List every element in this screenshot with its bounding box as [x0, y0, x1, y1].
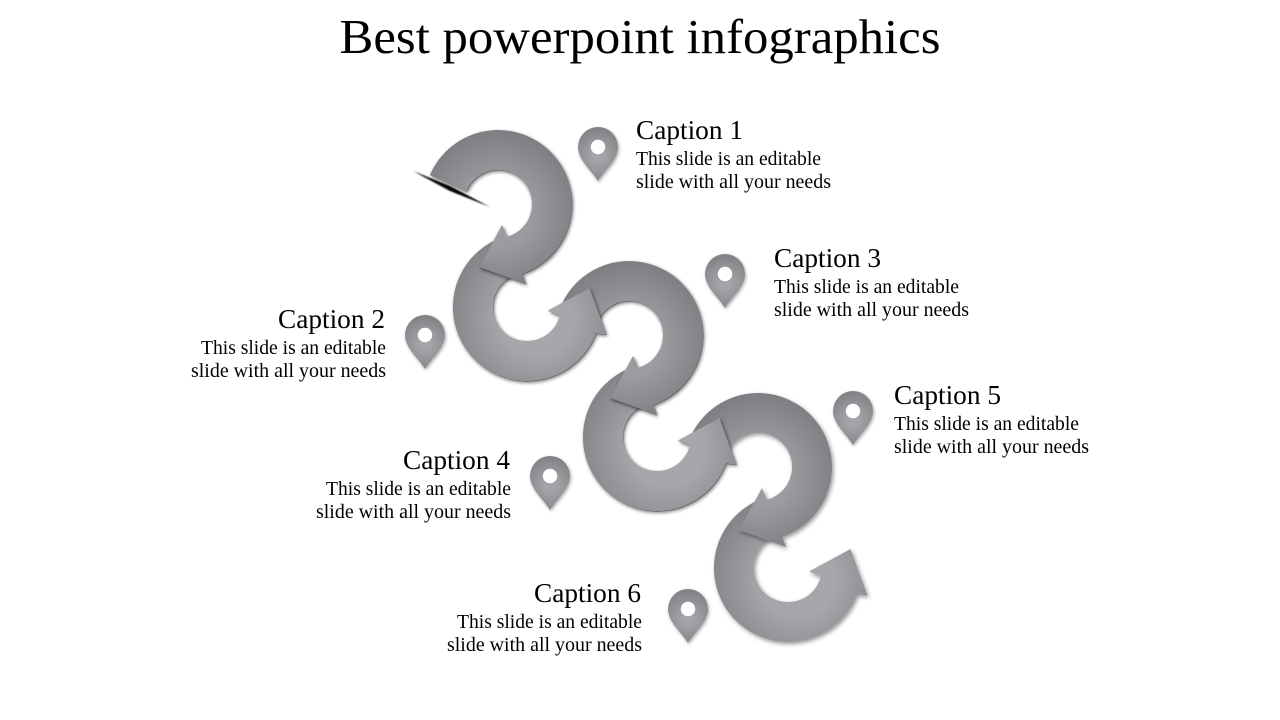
- pin 4: [530, 456, 570, 510]
- caption block 3: slide with all your needs: [774, 300, 969, 321]
- pin 6: [668, 589, 708, 643]
- caption block 6: This slide is an editable: [457, 612, 642, 633]
- arrow 6: [714, 498, 868, 642]
- caption block 1: This slide is an editable: [636, 149, 821, 170]
- caption block 2: [191, 304, 386, 382]
- caption block 1: slide with all your needs: [636, 172, 831, 193]
- arrow chain: [413, 130, 868, 642]
- caption block 4: Caption 4: [403, 445, 511, 475]
- caption block 1: [636, 115, 831, 193]
- arrow 4: [583, 367, 736, 511]
- caption block 2: Caption 2: [278, 304, 385, 334]
- caption block 6: slide with all your needs: [447, 635, 642, 656]
- pin 3: [705, 254, 745, 308]
- caption block 2: slide with all your needs: [191, 361, 386, 382]
- arrow 5: [690, 393, 832, 547]
- pin 2: [405, 315, 445, 369]
- caption block 4: slide with all your needs: [316, 502, 511, 523]
- caption block 4: This slide is an editable: [326, 479, 511, 500]
- caption block 6: Caption 6: [534, 578, 641, 608]
- caption block 5: This slide is an editable: [894, 414, 1079, 435]
- pin 1: [578, 127, 618, 181]
- pin 5: [833, 391, 873, 445]
- caption block 5: [894, 380, 1089, 458]
- title: Best powerpoint infographics: [340, 9, 940, 64]
- arrow 1: [430, 130, 572, 284]
- caption block 1: Caption 1: [636, 115, 743, 145]
- caption block 4: [316, 445, 511, 523]
- caption block 2: This slide is an editable: [201, 338, 386, 359]
- arrow 3: [561, 261, 703, 415]
- caption block 3: Caption 3: [774, 243, 881, 273]
- arrow 1 cut-edge shadow: [413, 171, 490, 207]
- arrow 2: [453, 237, 606, 381]
- caption block 5: Caption 5: [894, 380, 1001, 410]
- caption block 5: slide with all your needs: [894, 437, 1089, 458]
- caption block 3: [774, 243, 969, 321]
- caption block 3: This slide is an editable: [774, 277, 959, 298]
- caption block 6: [447, 578, 642, 656]
